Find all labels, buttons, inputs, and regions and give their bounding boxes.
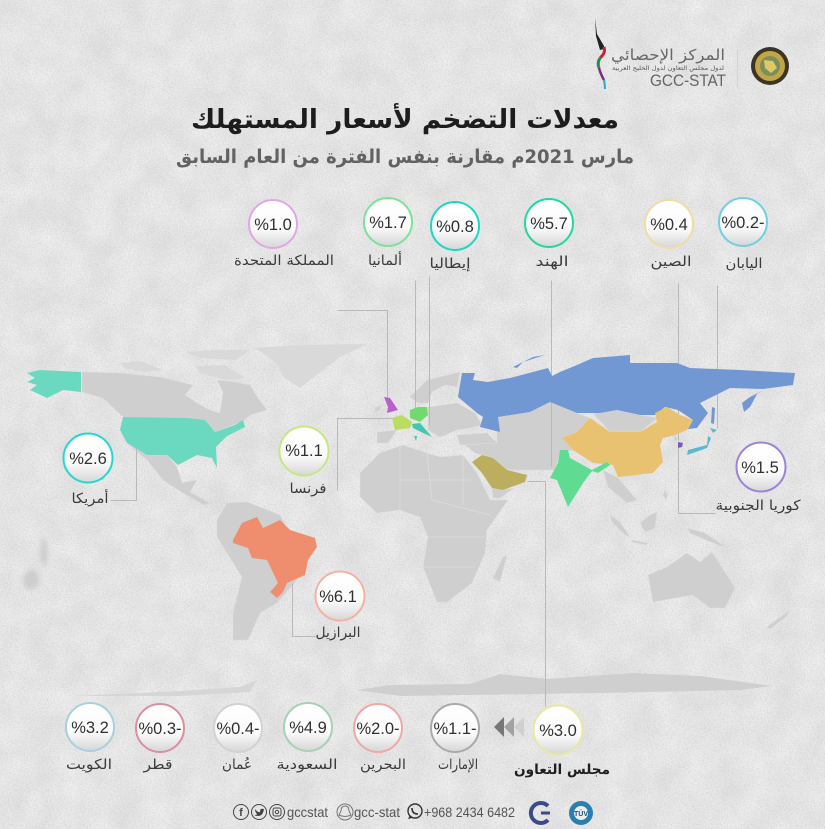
stat: brazil [316, 572, 364, 641]
stat: france [280, 426, 328, 497]
icon: facebook: f [239, 807, 243, 819]
australia [648, 552, 735, 608]
subtitle: مارس 2021م مقارنة بنفس الفترة من العام السابق [176, 146, 634, 168]
stat: india [525, 199, 573, 270]
icon: certification c [531, 803, 550, 823]
stat: bahrain: %2.0- [356, 720, 400, 738]
icon: instagram [270, 804, 284, 820]
stat: china [645, 200, 693, 270]
stat: china: %0.4 [650, 216, 688, 234]
logo: GCC-STAT [595, 18, 738, 90]
stat: uae: الإمارات [438, 757, 478, 773]
italy [412, 423, 432, 441]
stat: gcc: مجلس التعاون [514, 762, 610, 778]
stat: japan: %0.2- [721, 214, 765, 232]
phone number: +968 2434 6482 [424, 804, 515, 820]
south east asia [603, 470, 637, 503]
world map [27, 276, 795, 706]
stat: japan [719, 198, 767, 272]
spain [377, 430, 397, 443]
leader lines [110, 276, 718, 706]
stat: qatar: قطر [142, 757, 172, 773]
scandinavia [410, 372, 460, 403]
icon: whatsapp [408, 804, 422, 819]
logo: GCC emblem [751, 47, 789, 85]
stat: gcc: %3.0 [539, 722, 577, 740]
title: معدلات التضخم لأسعار المستهلك [191, 103, 619, 135]
stat: bahrain [354, 704, 406, 773]
stat: oman [214, 704, 262, 773]
stat: uae: %1.1- [433, 720, 477, 738]
stat: united kingdom: المملكة المتحدة [234, 253, 334, 269]
uk [384, 397, 398, 413]
stat: china: الصين [650, 254, 692, 270]
indonesia and philippines [610, 490, 727, 548]
greenland and arctic [120, 344, 367, 388]
new zealand [767, 610, 790, 629]
stat: kuwait: الكويت [66, 757, 112, 773]
stat: brazil: %6.1 [319, 588, 357, 606]
mexico and central america [127, 443, 210, 505]
stat: italy: إيطاليا [430, 256, 471, 272]
stat: saudi arabia: السعودية [276, 757, 338, 773]
turkey [457, 433, 497, 445]
canada [82, 372, 267, 432]
stat: south korea: %1.5 [741, 459, 779, 477]
logo: GCC-STAT: المركز الإحصائي [611, 46, 725, 65]
antarctica [357, 673, 772, 696]
japan [687, 428, 717, 455]
stat: germany [364, 198, 412, 269]
stat: italy: %0.8 [436, 218, 474, 236]
north korea [674, 435, 678, 441]
stat: france: فرنسا [290, 481, 326, 497]
logo: GCC-STAT: GCC-STAT [650, 71, 726, 90]
stat: south korea [716, 442, 801, 514]
icon: facebook [234, 804, 248, 820]
icon: twitter [252, 804, 266, 820]
stat: kuwait: %3.2 [71, 719, 109, 737]
stat: saudi arabia: %4.9 [289, 719, 327, 737]
brazil [233, 517, 317, 598]
stat: kuwait [66, 703, 114, 773]
stat: saudi arabia [276, 703, 338, 773]
handle: gcc-stat: gcc-stat [354, 804, 400, 820]
logo: GCC-STAT: لدول مجلس التعاون لدول الخليج العربية [612, 65, 724, 72]
yemen and oman strip [492, 488, 514, 498]
stat: south korea: كوريا الجنوبية [716, 498, 801, 514]
usa: alaska [27, 370, 81, 398]
stat: gcc [514, 706, 610, 778]
south america [217, 502, 297, 640]
ireland [375, 405, 382, 412]
china [562, 407, 693, 477]
kamchatka, novaya zemlya and sakhalin [513, 355, 762, 424]
stat: united kingdom: %1.0 [254, 216, 292, 234]
stat: germany: ألمانيا [368, 251, 402, 269]
icon: tuv badge [569, 801, 593, 825]
stat: united kingdom [234, 200, 334, 269]
stat: usa [64, 434, 112, 507]
stat: india: %5.7 [530, 215, 568, 233]
icon: tuv badge: TÜV [574, 809, 588, 818]
south korea [678, 442, 683, 448]
stat: japan: اليابان [726, 256, 762, 272]
stat: brazil: البرازيل [316, 625, 360, 641]
mongolia [593, 410, 657, 432]
stat: bahrain: البحرين [360, 757, 406, 773]
stat: germany: %1.7 [369, 214, 407, 232]
russia [458, 355, 795, 432]
footer contacts [234, 801, 593, 825]
stat: india: الهند [536, 254, 568, 270]
india [550, 450, 610, 507]
france [392, 415, 412, 430]
gcc arabian peninsula [472, 455, 527, 490]
stat: usa: أمريكا [72, 489, 109, 507]
madagascar [493, 555, 507, 582]
stat: italy [430, 202, 479, 272]
stat: qatar: %0.3- [138, 720, 182, 738]
stat: qatar [136, 704, 184, 773]
stat: oman: %0.4- [216, 720, 260, 738]
stat: usa: %2.6 [69, 450, 107, 468]
africa [360, 445, 508, 602]
stat: oman: عُمان [222, 757, 252, 773]
western antarctic sliver [73, 680, 257, 696]
stat: france: %1.1 [285, 442, 323, 460]
africa borders [400, 445, 490, 567]
stat: uae [431, 704, 479, 773]
arrows [494, 717, 524, 737]
icon: snapchat [337, 804, 353, 820]
usa: mainland [120, 417, 245, 468]
middle and central asia [465, 402, 590, 470]
handle: gccstat: gccstat [287, 804, 328, 820]
europe [428, 403, 482, 437]
germany [410, 407, 428, 422]
